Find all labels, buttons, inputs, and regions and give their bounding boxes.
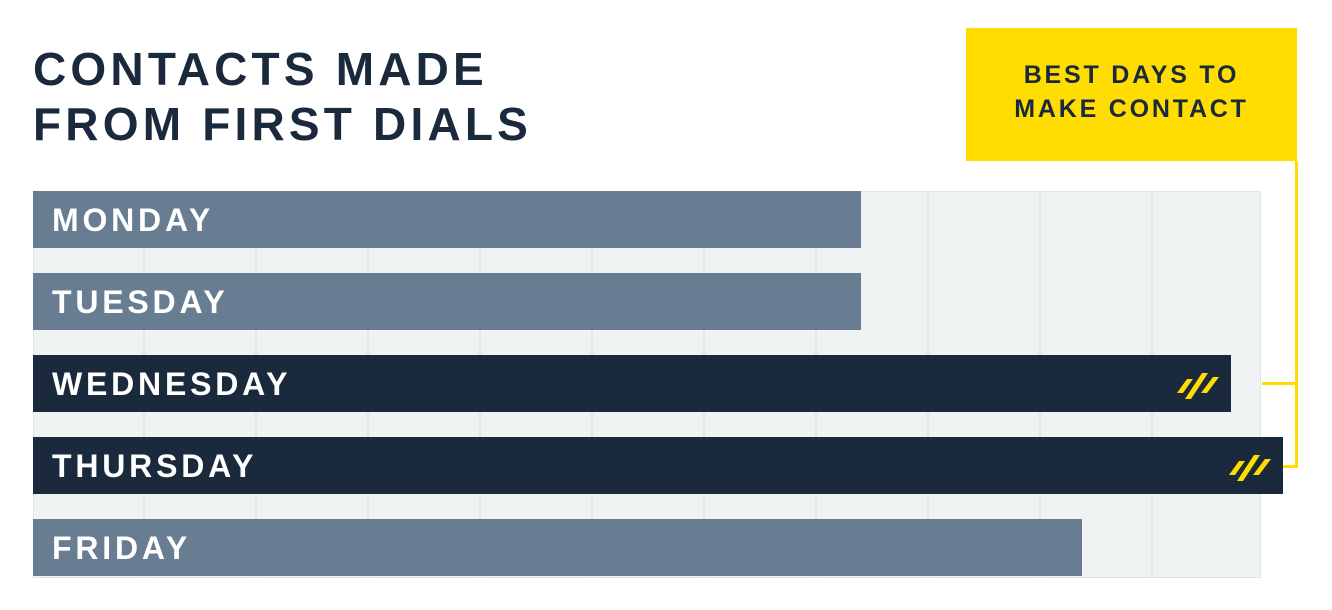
bar: thursday <box>33 437 1283 494</box>
bar: monday: MONDAY <box>52 202 214 238</box>
bar: tuesday <box>33 273 861 330</box>
bar: thursday: THURSDAY <box>52 448 257 484</box>
title: CONTACTS MADE <box>33 43 488 95</box>
icon: yellow stripes <box>1177 373 1219 399</box>
title <box>33 43 532 150</box>
bar: tuesday: TUESDAY <box>52 284 229 320</box>
chart grid background <box>33 191 1261 578</box>
bar: wednesday <box>33 355 1231 412</box>
title: FROM FIRST DIALS <box>33 98 532 150</box>
bar: friday <box>33 519 1082 576</box>
callout <box>966 28 1297 161</box>
bar: friday: FRIDAY <box>52 530 191 566</box>
callout: BEST DAYS TO <box>1024 61 1239 89</box>
bar: monday <box>33 191 861 248</box>
bar: wednesday: WEDNESDAY <box>52 366 291 402</box>
connector lines <box>1262 161 1298 468</box>
callout: MAKE CONTACT <box>1014 95 1249 123</box>
icon: yellow stripes <box>1229 455 1271 481</box>
